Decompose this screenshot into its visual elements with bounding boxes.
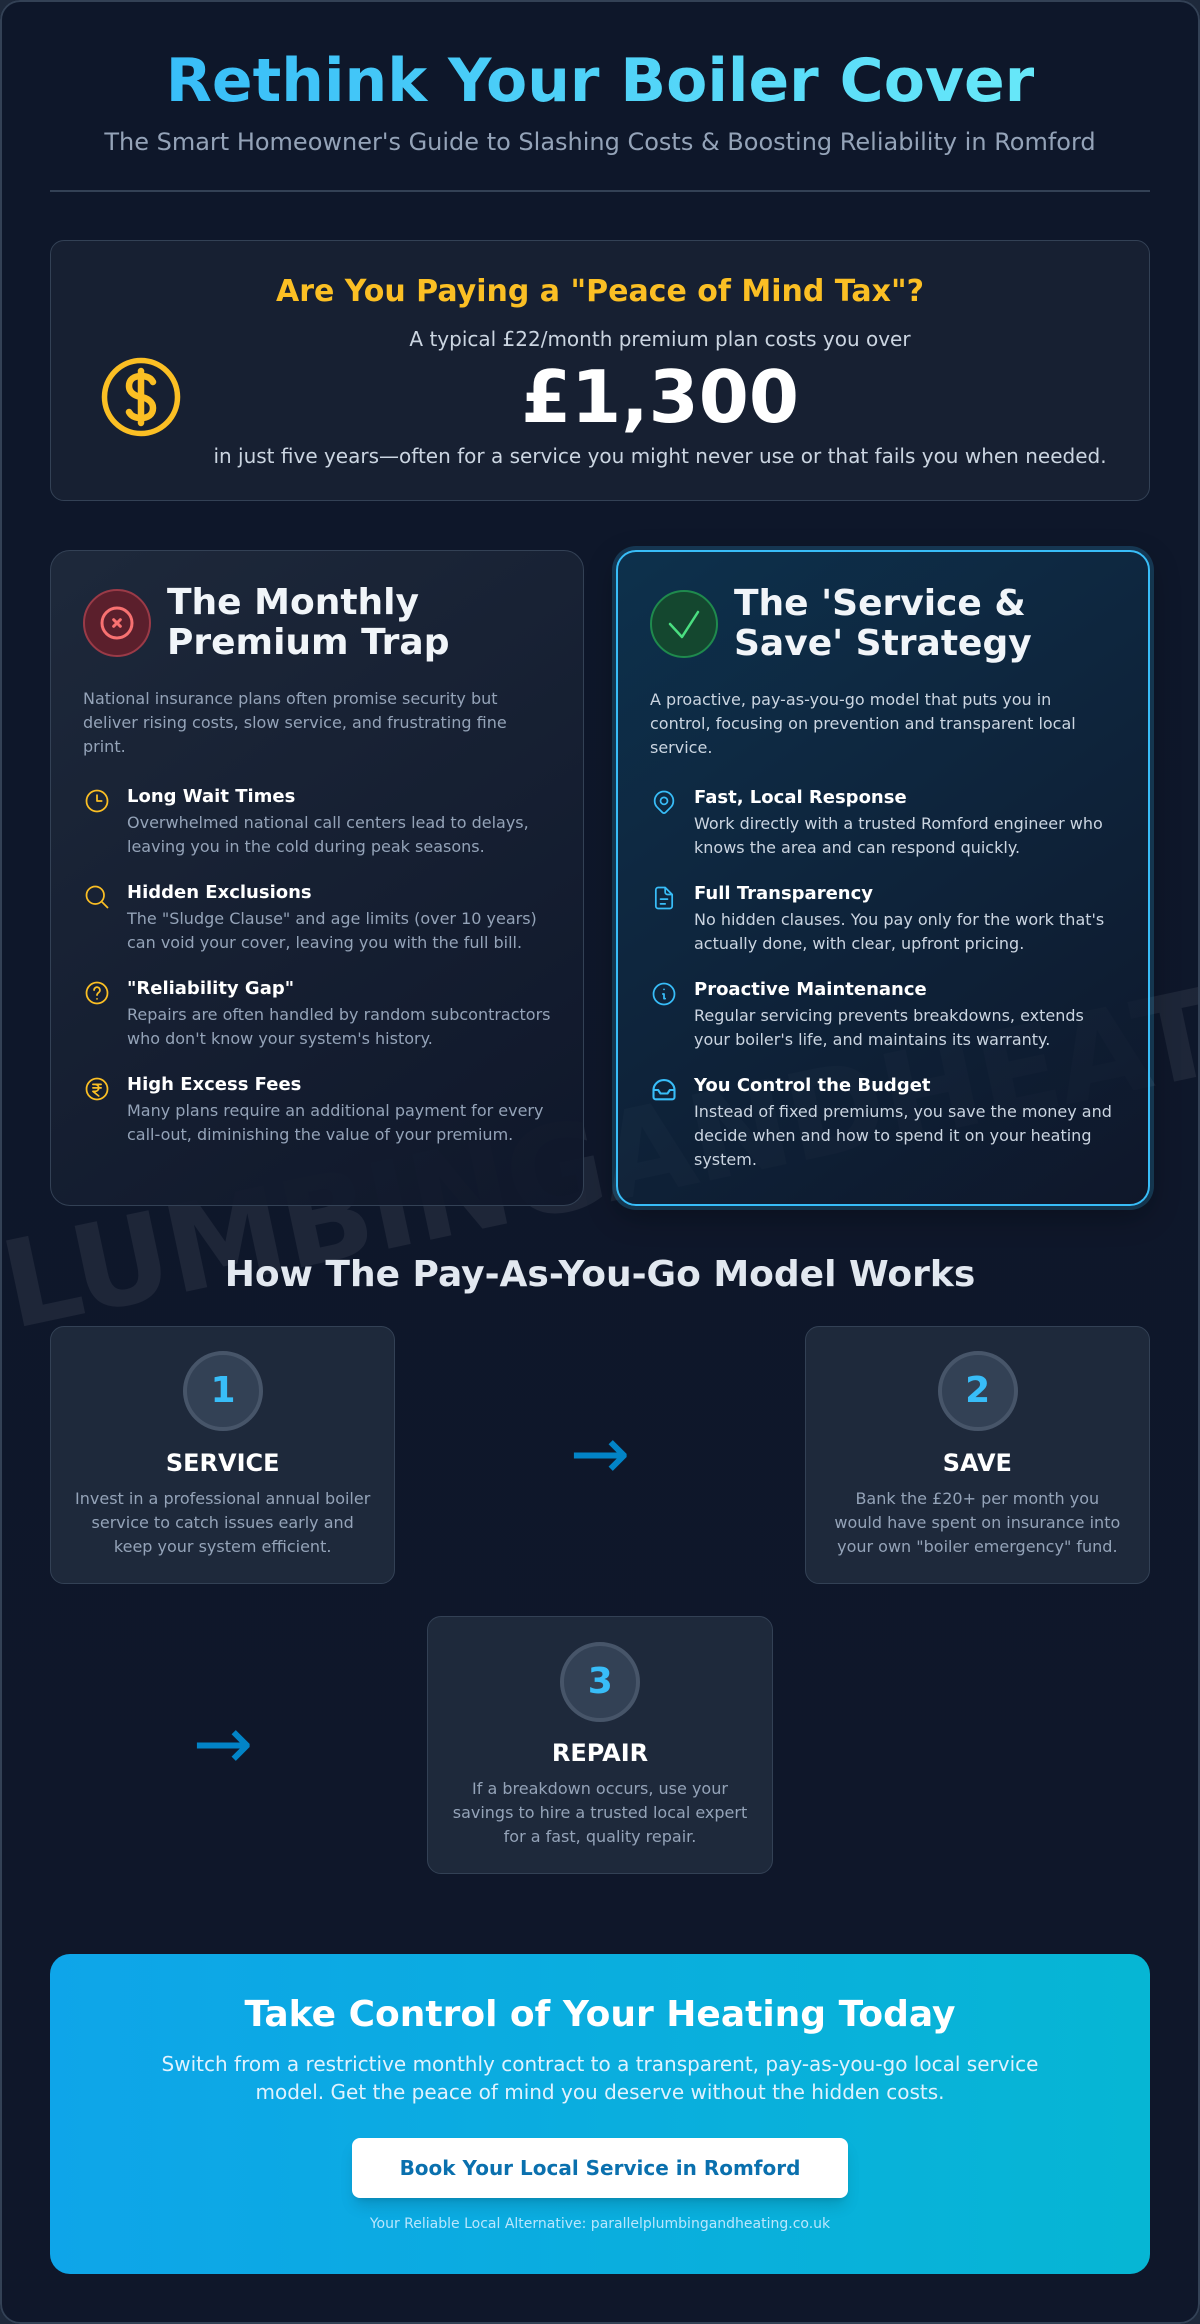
item: you control the budget: You Control the Budget bbox=[694, 1075, 931, 1096]
icon: dollar coin bbox=[102, 358, 180, 436]
step 1: service bbox=[50, 1326, 395, 1584]
icon: green check bbox=[650, 590, 718, 658]
item: reliability gap: Repairs are often handled by random subcontractors bbox=[127, 1005, 551, 1024]
item: hidden exclusions: Hidden Exclusions bbox=[127, 882, 312, 903]
panel: service and save strategy bbox=[616, 550, 1150, 1206]
item: reliability gap: who don't know your system's history. bbox=[127, 1029, 433, 1048]
button: book service bbox=[352, 2138, 848, 2198]
step text: repair: savings to hire a trusted local expert bbox=[453, 1803, 747, 1822]
heading: monthly premium trap: Premium Trap bbox=[167, 622, 450, 663]
heading: how it works: How The Pay-As-You-Go Model Works bbox=[225, 1254, 975, 1295]
item: high excess fees: Many plans require an additional payment for every bbox=[127, 1101, 543, 1120]
heading: monthly premium trap bbox=[167, 582, 450, 663]
item: long wait times: leaving you in the cold during peak seasons. bbox=[127, 837, 485, 856]
text: website: Your Reliable Local Alternative: parallelplumbingandheating.co.uk bbox=[370, 2216, 830, 2232]
step title: save: SAVE bbox=[943, 1449, 1012, 1477]
text: strategy intro: service. bbox=[650, 738, 712, 757]
step text: repair bbox=[453, 1779, 747, 1846]
step number 1 bbox=[183, 1351, 263, 1431]
item: high excess fees bbox=[86, 1074, 543, 1144]
step text: repair: If a breakdown occurs, use your bbox=[472, 1779, 728, 1798]
heading: service and save: Save' Strategy bbox=[734, 623, 1032, 664]
text: five years: in just five years—often for a service you might never use or that fails you when needed. bbox=[213, 444, 1107, 468]
item: fast local response: Fast, Local Response bbox=[694, 787, 907, 808]
heading: monthly premium trap: The Monthly bbox=[167, 582, 419, 623]
item: you control the budget: Instead of fixed premiums, you save the money and bbox=[694, 1102, 1112, 1121]
heading: take control: Take Control of Your Heating Today bbox=[244, 1994, 956, 2035]
title: Rethink Your Boiler Cover bbox=[166, 46, 1034, 116]
item: fast local response bbox=[654, 787, 1103, 857]
item: reliability gap: "Reliability Gap" bbox=[127, 978, 294, 999]
icon: red cross bbox=[83, 589, 151, 657]
text: trap intro: deliver rising costs, slow service, and frustrating fine bbox=[83, 713, 507, 732]
item: long wait times bbox=[86, 786, 529, 856]
item: hidden exclusions: can void your cover, leaving you with the full bill. bbox=[127, 933, 522, 952]
item: fast local response: Work directly with a trusted Romford engineer who bbox=[694, 814, 1103, 833]
step text: service: Invest in a professional annual boiler bbox=[75, 1489, 370, 1508]
step number 3: 3 bbox=[588, 1661, 613, 1702]
heading: service and save: The 'Service & bbox=[734, 583, 1026, 624]
item: fast local response: knows the area and can respond quickly. bbox=[694, 838, 1020, 857]
text: trap intro: print. bbox=[83, 737, 126, 756]
heading: service and save bbox=[734, 583, 1032, 664]
step number 2: 2 bbox=[965, 1370, 990, 1411]
button: book service: Book Your Local Service in Romford bbox=[400, 2156, 800, 2180]
item: hidden exclusions: The "Sludge Clause" and age limits (over 10 years) bbox=[127, 909, 537, 928]
item: proactive maintenance: your boiler's life, and maintains its warranty. bbox=[694, 1030, 1050, 1049]
item: you control the budget: decide when and how to spend it on your heating bbox=[694, 1126, 1091, 1145]
step 3: repair bbox=[427, 1616, 773, 1874]
item: proactive maintenance bbox=[652, 979, 1084, 1049]
item: hidden exclusions bbox=[86, 882, 537, 952]
text: cta body: model. Get the peace of mind you deserve without the hidden costs. bbox=[256, 2080, 944, 2104]
text: strategy intro: A proactive, pay-as-you-go model that puts you in bbox=[650, 690, 1051, 709]
item: long wait times: Overwhelmed national call centers lead to delays, bbox=[127, 813, 529, 832]
step text: repair: for a fast, quality repair. bbox=[504, 1827, 696, 1846]
item: high excess fees: call-out, diminishing the value of your premium. bbox=[127, 1125, 513, 1144]
step title: repair: REPAIR bbox=[552, 1739, 648, 1767]
panel: call to action bbox=[50, 1954, 1150, 2274]
item: long wait times: Long Wait Times bbox=[127, 786, 295, 807]
step text: save: your own "boiler emergency" fund. bbox=[837, 1537, 1118, 1556]
text: trap intro: National insurance plans often promise security but bbox=[83, 689, 498, 708]
text: trap intro bbox=[83, 689, 507, 756]
step number 2 bbox=[938, 1351, 1018, 1431]
step number 1: 1 bbox=[210, 1370, 236, 1411]
item: high excess fees: High Excess Fees bbox=[127, 1074, 301, 1095]
text: cta body: Switch from a restrictive monthly contract to a transparent, pay-as-you-go local service bbox=[162, 2052, 1038, 2076]
arrow: step 2 to 3: → bbox=[193, 1701, 253, 1785]
step title: service: SERVICE bbox=[166, 1449, 280, 1477]
item: full transparency: No hidden clauses. You pay only for the work that's bbox=[694, 910, 1104, 929]
item: reliability gap bbox=[86, 978, 551, 1048]
step text: save: would have spent on insurance into bbox=[834, 1513, 1120, 1532]
panel: monthly premium trap bbox=[50, 550, 584, 1206]
stat: total cost: £1,300 bbox=[521, 355, 799, 439]
text: strategy intro bbox=[650, 690, 1076, 757]
step text: service: keep your system efficient. bbox=[114, 1537, 331, 1556]
arrow: step 1 to 2: → bbox=[570, 1411, 630, 1495]
step number 3 bbox=[560, 1642, 640, 1722]
subtitle: The Smart Homeowner's Guide to Slashing Costs & Boosting Reliability in Romford bbox=[104, 128, 1096, 156]
item: you control the budget bbox=[652, 1075, 1112, 1169]
step text: save bbox=[834, 1489, 1120, 1556]
item: proactive maintenance: Proactive Maintenance bbox=[694, 979, 927, 1000]
item: proactive maintenance: Regular servicing prevents breakdowns, extends bbox=[694, 1006, 1084, 1025]
item: full transparency bbox=[654, 883, 1104, 953]
text: cta body bbox=[162, 2052, 1038, 2104]
step text: service: service to catch issues early and bbox=[92, 1513, 354, 1532]
step text: save: Bank the £20+ per month you bbox=[855, 1489, 1099, 1508]
item: full transparency: Full Transparency bbox=[694, 883, 873, 904]
step 2: save bbox=[805, 1326, 1150, 1584]
item: you control the budget: system. bbox=[694, 1150, 757, 1169]
panel: peace of mind tax bbox=[50, 240, 1150, 501]
step text: service bbox=[75, 1489, 370, 1556]
text: strategy intro: control, focusing on prevention and transparent local bbox=[650, 714, 1076, 733]
item: full transparency: actually done, with clear, upfront pricing. bbox=[694, 934, 1024, 953]
heading: peace of mind tax: Are You Paying a "Peace of Mind Tax"? bbox=[276, 274, 924, 309]
text: typical plan cost: A typical £22/month premium plan costs you over bbox=[409, 327, 911, 351]
